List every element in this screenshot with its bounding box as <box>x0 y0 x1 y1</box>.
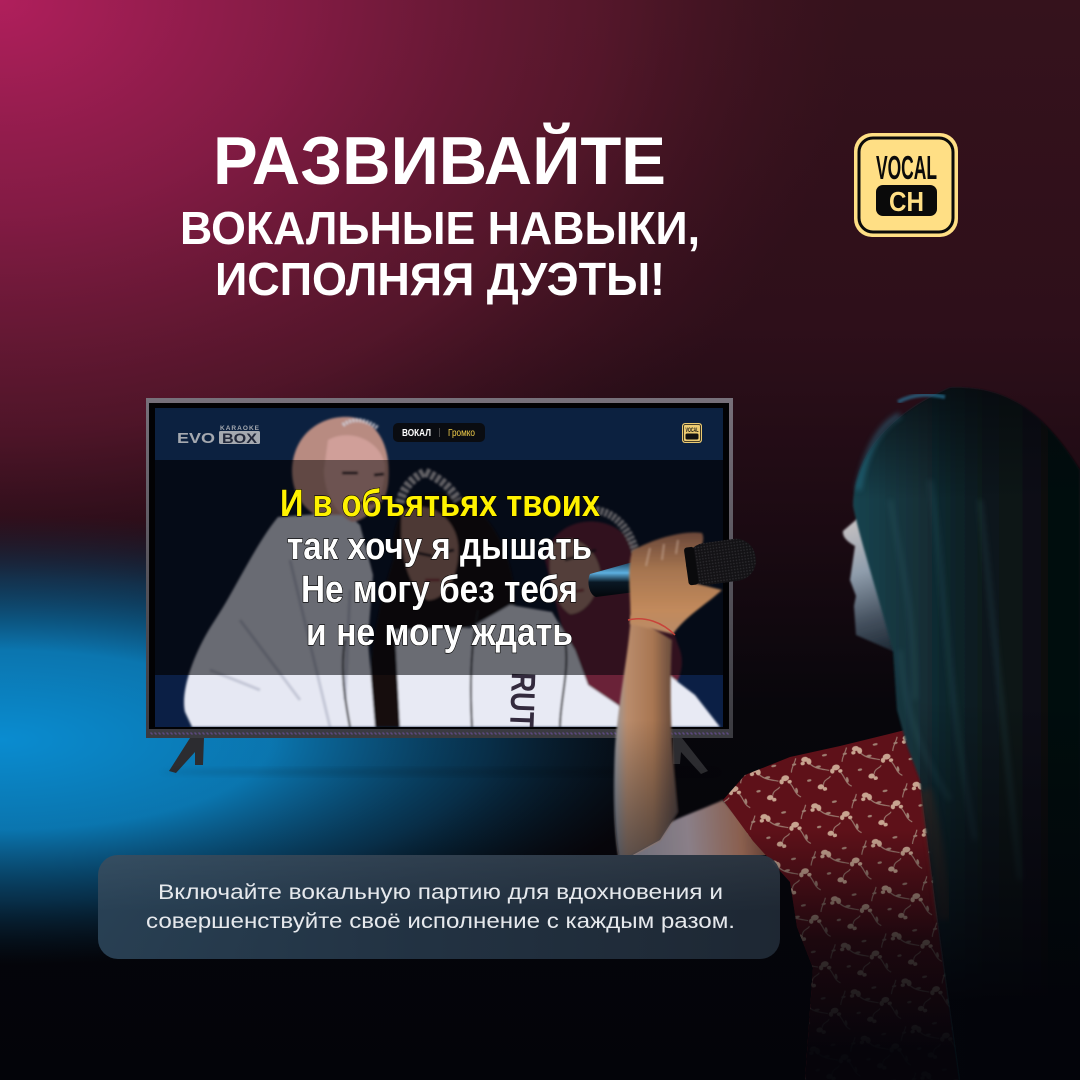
hand <box>629 532 722 634</box>
neck and face <box>843 500 905 652</box>
microphone head <box>683 536 759 588</box>
lyrics: и не могу ждать <box>306 612 573 654</box>
tv status pill <box>393 423 485 442</box>
caption panel: Включайте вокальную партию для вдохновения и <box>158 880 723 904</box>
tv stand legs <box>169 738 708 774</box>
center crown <box>400 472 458 503</box>
tv status pill: ВОКАЛ <box>402 428 431 439</box>
hair <box>853 388 1080 1080</box>
tv floor glow <box>160 768 720 776</box>
left face <box>324 435 385 522</box>
microphone handle <box>588 560 650 597</box>
title: РАЗВИВАЙТЕ <box>213 122 666 199</box>
tv <box>146 398 733 738</box>
lyrics <box>280 483 600 654</box>
title: ВОКАЛЬНЫЕ НАВЫКИ, <box>180 202 700 254</box>
left hair <box>292 417 389 515</box>
title <box>180 122 700 305</box>
jacket lettering: RUT <box>502 672 542 729</box>
badge: vocal channel: VOCAL <box>876 149 937 186</box>
lyrics band overlay <box>155 460 723 675</box>
right face <box>550 539 600 614</box>
badge: vocal channel: CH <box>889 186 924 217</box>
jacket creases <box>210 560 350 727</box>
lyrics: Не могу без тебя <box>301 569 578 611</box>
title: ИСПОЛНЯЯ ДУЭТЫ! <box>215 253 665 305</box>
top band overlay <box>292 416 388 460</box>
tv logo: evo box: KARAOKE <box>220 425 260 432</box>
knuckle highlights <box>646 540 678 566</box>
caption panel: совершенствуйте своё исполнение с каждым разом. <box>146 909 735 933</box>
facial features <box>342 473 596 560</box>
left jacket <box>184 512 375 727</box>
right crown <box>596 510 636 552</box>
lyrics: И в объятьях твоих <box>280 483 600 525</box>
left crown <box>343 420 378 428</box>
tv logo: evo box <box>177 425 260 447</box>
right woman hair <box>545 521 682 716</box>
red bracelet <box>628 619 675 635</box>
center jacket <box>395 605 720 727</box>
tv logo: evo box: BOX <box>222 430 258 446</box>
forearm <box>614 615 678 862</box>
tv screen photo <box>155 408 723 729</box>
tv small badge: VOCAL <box>686 427 699 434</box>
upper arm <box>631 799 766 855</box>
middle face <box>401 507 458 600</box>
caption panel <box>98 855 780 959</box>
middle hair <box>370 493 515 727</box>
tv logo: evo box: EVO <box>177 430 215 447</box>
tv status pill: Громко <box>448 428 475 439</box>
dress <box>723 730 990 1080</box>
lyrics: так хочу я дышать <box>287 526 592 568</box>
tv small badge <box>682 423 702 443</box>
badge: vocal channel <box>854 133 958 237</box>
singer <box>588 388 1080 1080</box>
